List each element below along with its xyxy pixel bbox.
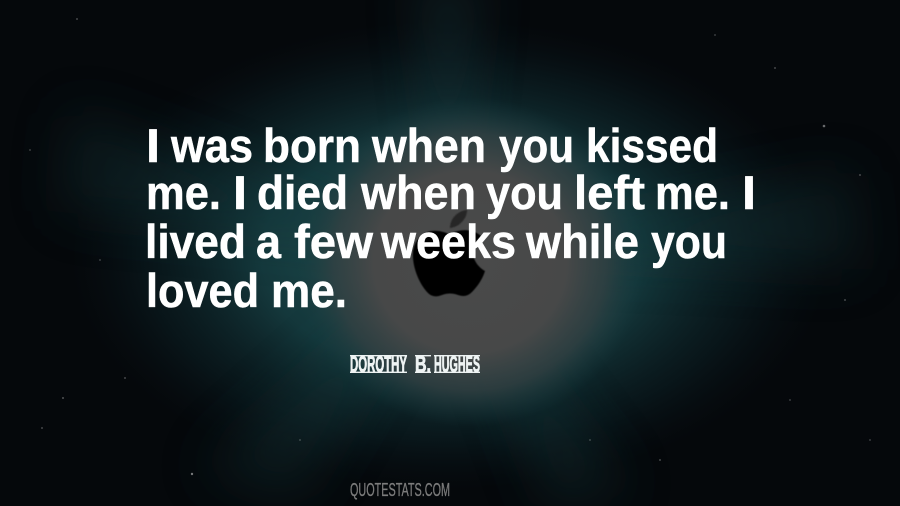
quote text: I — [233, 166, 247, 219]
icon: apple logo — [413, 210, 485, 296]
quote text: weeks — [380, 215, 516, 268]
quote text: you — [651, 215, 727, 268]
quote text: me. — [146, 166, 221, 219]
quote text: loved — [146, 264, 259, 317]
quote text: I — [742, 166, 756, 219]
quote text: lived — [145, 215, 246, 268]
quote text: left — [574, 166, 645, 219]
quote text: I — [146, 119, 160, 172]
quote text: died — [257, 166, 348, 219]
author name: DOROTHY — [350, 351, 407, 377]
quote text: born — [263, 119, 361, 172]
quote text: while — [525, 215, 639, 268]
watermark: QUOTESTATS.COM — [350, 480, 450, 500]
quote text: me. — [271, 264, 347, 317]
quote text: you — [499, 119, 574, 172]
quote text: was — [170, 119, 253, 172]
author name: B. — [415, 351, 431, 377]
text: HUGHES — [434, 351, 480, 377]
quote text: when — [371, 119, 486, 172]
quote text: me. — [655, 166, 730, 219]
quote text: a — [256, 215, 282, 268]
quote text: few — [294, 215, 373, 268]
quote text: you — [486, 166, 563, 219]
quote text: kissed — [586, 119, 718, 172]
quote text: when — [360, 166, 476, 219]
quote text — [145, 119, 756, 317]
